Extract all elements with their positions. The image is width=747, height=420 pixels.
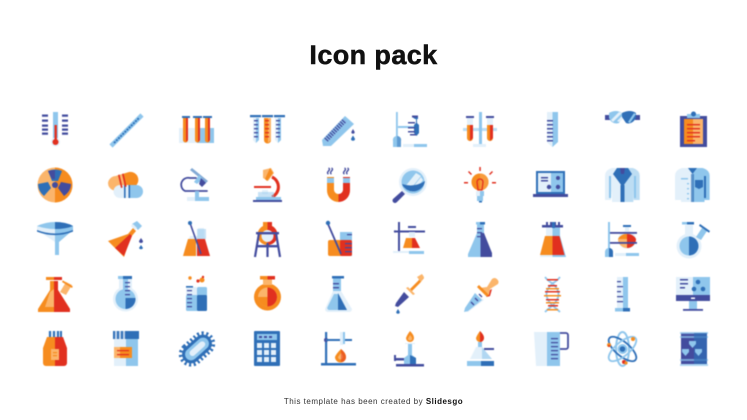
icon: tall erlenmeyer blue [468,222,492,257]
icon: measuring jug [534,332,568,366]
icon: outline microscope [181,168,209,201]
icon: horseshoe magnet [327,168,350,202]
icon: round orange flask [254,276,281,310]
icon: chemical barrel [680,332,708,366]
footer credit: This template has been created by Slidesgo [284,397,463,406]
icon: conical flask with side tube [38,277,73,312]
icon: blue round flask [113,276,138,312]
icon: atom [605,332,640,366]
icon: angled tube with drops [322,116,355,146]
icon: lab coat pocket [675,168,710,202]
icon: light bulb idea [464,167,496,202]
icon: goggles [605,111,640,123]
icon: lab coat dark lapels [605,168,640,202]
icon: test tube rack [463,112,497,147]
icon: bunsen burner small [394,331,424,366]
icon: measuring cylinder [615,277,630,312]
icon: three test tubes [179,116,214,143]
icon: graduated tubes [250,115,285,144]
icon: stand with flask [393,112,427,147]
icon: glass pipette [111,115,142,146]
icon: thermometer [42,112,68,146]
icon: blue erlenmeyer [325,276,352,312]
icon: beaker with bubbles [186,276,207,311]
icon: dropper light [464,278,498,312]
icon: tipped flask with drops [108,221,143,257]
title: Icon pack [309,40,438,70]
icon: chemical bottle [43,331,67,366]
icon: side-arm flask [676,222,710,258]
icon: funnel flask [393,222,425,254]
icon: flask on tripod [255,222,280,257]
icon: dropper dark [395,274,424,314]
icon: computer monitor [676,277,710,311]
icon: clipboard [680,112,707,147]
icon: orange microscope [253,168,282,202]
icon: capsules [108,172,143,198]
icon: calculator [254,331,280,366]
icon: graduated cylinder [547,112,558,147]
icon: burner on stand [321,332,356,366]
icon: stand with round flask [605,222,639,257]
icon: beaker with rod [183,221,210,256]
icon: DNA helix [544,277,561,312]
icon: specimen jar [113,331,139,366]
icon: bunsen burner tall [467,331,494,366]
icon: laptop [533,171,568,197]
icon: radiation disc [38,168,72,202]
icon: large orange flask [540,222,566,257]
icon: funnel [37,222,73,255]
icon: magnifier [393,168,427,203]
icon: beaker and orange liquid [326,221,352,256]
icon: bacterium [177,330,217,368]
